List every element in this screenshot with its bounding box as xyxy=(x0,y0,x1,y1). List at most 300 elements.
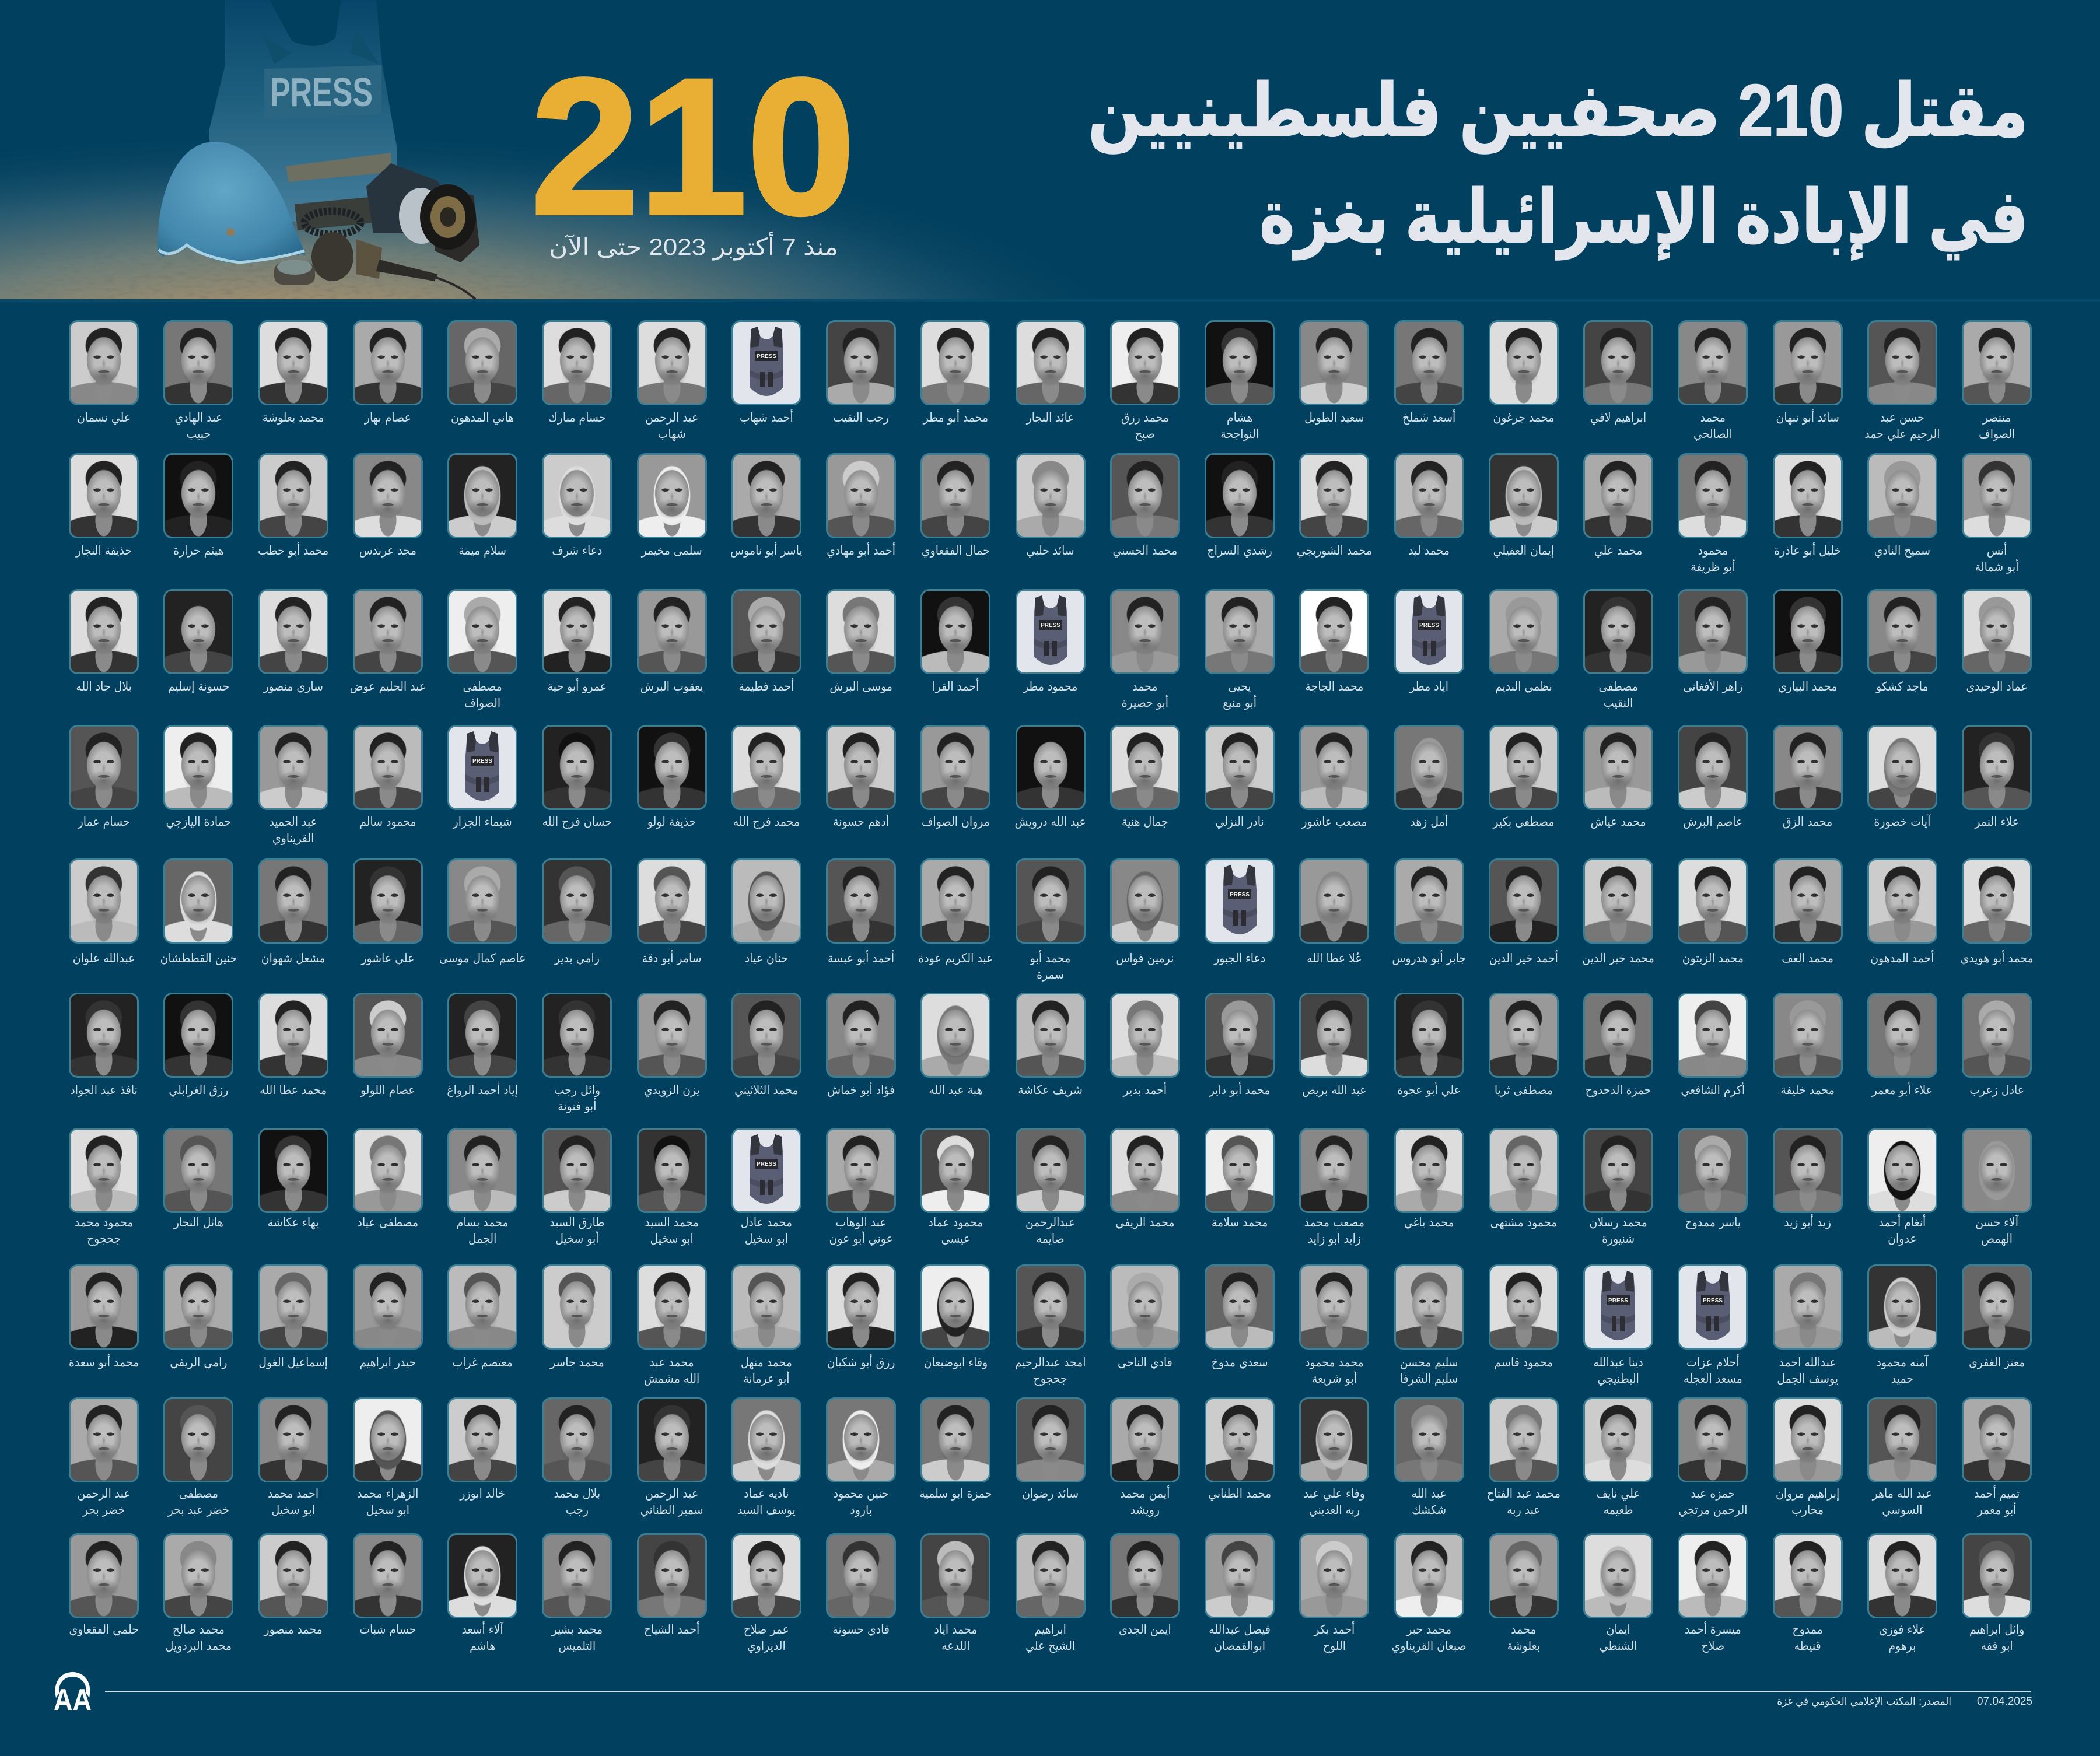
name: عبد الله بريص xyxy=(1302,1083,1367,1097)
card xyxy=(1489,320,1559,425)
portrait xyxy=(1773,453,1843,538)
name: ابو سخيل xyxy=(745,1232,788,1246)
name: محمد بعلوشة xyxy=(262,411,324,425)
portrait xyxy=(1583,320,1653,405)
name: يوسف الجمل xyxy=(1777,1372,1838,1386)
name xyxy=(145,1485,252,1518)
name: محمد أبو هويدي xyxy=(1961,951,2034,965)
card xyxy=(1476,725,1571,846)
name: محمد فرج الله xyxy=(733,815,800,829)
card xyxy=(1571,725,1665,846)
name xyxy=(524,1082,630,1114)
name: محمد سلامة xyxy=(1212,1215,1268,1229)
portrait xyxy=(163,1397,233,1482)
portrait xyxy=(1678,1397,1748,1482)
name: مسعد العجله xyxy=(1684,1372,1742,1386)
name xyxy=(1186,678,1293,711)
name: حنين محمود xyxy=(834,1487,889,1501)
card xyxy=(908,589,1003,711)
portrait xyxy=(1205,589,1275,674)
name xyxy=(1471,1485,1577,1518)
card xyxy=(151,993,246,1114)
name xyxy=(1660,409,1766,442)
portrait xyxy=(353,993,423,1078)
portrait xyxy=(1299,589,1369,674)
card xyxy=(1098,1397,1192,1518)
card xyxy=(624,589,719,711)
portrait xyxy=(1583,725,1653,810)
card xyxy=(719,453,814,575)
portrait xyxy=(1962,320,2032,405)
name xyxy=(1565,1485,1671,1518)
card xyxy=(435,453,530,575)
name: حمادة اليازجي xyxy=(166,815,231,829)
name: سمير الطناني xyxy=(640,1503,704,1517)
card xyxy=(151,725,246,846)
name: أكرم الشافعي xyxy=(1681,1083,1745,1097)
name xyxy=(1376,1485,1482,1518)
name: النواجحة xyxy=(1220,427,1259,441)
card xyxy=(1855,858,1950,983)
card xyxy=(435,993,530,1114)
portrait xyxy=(258,858,328,944)
name: رجب xyxy=(566,1503,589,1517)
portrait xyxy=(447,1397,517,1482)
icon: camera xyxy=(366,163,480,262)
name: التلميس xyxy=(559,1639,596,1653)
name: أبو معمر xyxy=(1978,1503,2017,1517)
card xyxy=(1192,858,1287,983)
name xyxy=(1565,1354,1671,1387)
name: إياد أحمد الرواغ xyxy=(447,1083,518,1097)
name: مصطفى بكير xyxy=(1493,815,1554,829)
name: عُلا عطا الله xyxy=(1307,951,1362,965)
name: زيد أبو زيد xyxy=(1784,1215,1831,1229)
name: ربه العديني xyxy=(1309,1503,1360,1517)
card xyxy=(1665,453,1760,575)
card xyxy=(1855,453,1950,575)
name xyxy=(1565,1621,1671,1654)
name: عبد الوهاب xyxy=(836,1215,887,1229)
card xyxy=(57,725,151,846)
card xyxy=(814,1128,908,1247)
name xyxy=(1092,678,1198,711)
name xyxy=(1281,1354,1387,1387)
portrait xyxy=(69,1533,139,1618)
portrait xyxy=(1205,320,1275,405)
name: خضر بحر xyxy=(83,1503,125,1517)
icon: press vest xyxy=(1678,1264,1748,1350)
name: وفاء علي عبد xyxy=(1304,1487,1365,1501)
name: محمد خير الدين xyxy=(1582,951,1654,965)
card xyxy=(246,589,341,711)
row 4 of portraits xyxy=(57,725,2045,846)
card xyxy=(814,453,908,575)
portrait xyxy=(163,725,233,810)
portrait xyxy=(1016,993,1086,1078)
name: ناديه عماد xyxy=(744,1487,789,1501)
row 10 of portraits xyxy=(57,1533,2045,1654)
name: فادي الناجي xyxy=(1118,1355,1172,1369)
portrait xyxy=(542,1264,612,1350)
portrait xyxy=(163,453,233,538)
name xyxy=(1755,1621,1861,1654)
name: هيثم حرارة xyxy=(173,544,224,558)
card xyxy=(246,858,341,983)
card xyxy=(530,453,624,575)
name: ابو سخيل xyxy=(366,1503,410,1517)
name: محمد اياد xyxy=(934,1622,977,1636)
name: جحجوح xyxy=(1034,1372,1068,1386)
name: مصطفى xyxy=(463,679,502,693)
portrait xyxy=(447,320,517,405)
name xyxy=(1660,1621,1766,1654)
name xyxy=(429,1214,536,1247)
portrait xyxy=(1962,1533,2032,1618)
name xyxy=(998,1214,1104,1247)
portrait xyxy=(1394,858,1464,944)
name: محمد أبو xyxy=(1030,951,1070,965)
portrait xyxy=(1489,725,1559,810)
name: حنين القططشان xyxy=(160,951,237,965)
name: هبة عبد الله xyxy=(929,1083,982,1097)
card xyxy=(1665,993,1760,1114)
portrait xyxy=(353,1533,423,1618)
name: اللدعه xyxy=(942,1639,970,1653)
name: سليم محسن xyxy=(1400,1355,1458,1369)
name: عاصم البرش xyxy=(1683,815,1742,829)
name: اللوح xyxy=(1323,1639,1346,1653)
portrait xyxy=(921,1533,991,1618)
name: محمد عياش xyxy=(1591,815,1646,829)
card xyxy=(1476,589,1571,711)
portrait xyxy=(542,320,612,405)
card xyxy=(624,1128,719,1247)
card xyxy=(908,993,1003,1114)
card xyxy=(1110,320,1180,441)
name: أبو عرمانة xyxy=(743,1372,789,1386)
portrait xyxy=(258,589,328,674)
icon: press vest xyxy=(447,725,517,810)
name: آلاء أسعد xyxy=(462,1622,503,1636)
card xyxy=(1950,993,2044,1114)
name xyxy=(1220,411,1259,441)
portrait xyxy=(1962,725,2032,810)
portrait xyxy=(353,453,423,538)
name: سمرة xyxy=(1037,968,1064,982)
name: ساري منصور xyxy=(263,679,323,693)
portrait xyxy=(353,1264,423,1350)
card xyxy=(1760,453,1855,575)
name: عبدالله علوان xyxy=(73,951,135,965)
name: السوسي xyxy=(1882,1503,1922,1517)
name: وائل ابراهيم xyxy=(1969,1622,2024,1636)
name: أحمد الشياح xyxy=(644,1622,699,1636)
name: امجد عبدالرحيم xyxy=(1015,1355,1086,1369)
card xyxy=(1760,858,1855,983)
portrait xyxy=(732,858,802,944)
card xyxy=(1381,1264,1476,1387)
name: الزهراء محمد xyxy=(357,1487,418,1501)
card xyxy=(1571,1533,1665,1654)
portrait xyxy=(353,1128,423,1213)
card xyxy=(624,1397,719,1518)
name: عصام بهار xyxy=(365,411,411,425)
portrait xyxy=(69,1128,139,1213)
name: حسام مبارك xyxy=(548,411,606,425)
portrait xyxy=(1962,453,2032,538)
card xyxy=(151,1128,246,1247)
name: منتصر xyxy=(1983,411,2011,425)
name: عبد الرحمن xyxy=(77,1487,131,1501)
name: محمد عادل xyxy=(741,1215,792,1229)
portrait xyxy=(1867,1128,1937,1213)
name xyxy=(713,1485,820,1518)
name: علي نايف xyxy=(1597,1487,1640,1501)
card xyxy=(246,725,341,846)
card xyxy=(826,320,896,425)
card xyxy=(530,993,624,1114)
portrait xyxy=(1299,1533,1369,1618)
portrait xyxy=(1867,589,1937,674)
name: محمد الجاجة xyxy=(1305,679,1363,693)
card xyxy=(1287,589,1381,711)
name: عمر صلاح xyxy=(744,1622,789,1636)
card xyxy=(908,725,1003,846)
portrait xyxy=(163,589,233,674)
name: نظمي النديم xyxy=(1495,679,1552,693)
name: محمد الزيتون xyxy=(1682,951,1744,965)
card xyxy=(435,1128,530,1247)
portrait xyxy=(921,1397,991,1482)
name: آلاء حسن xyxy=(1975,1215,2018,1229)
portrait xyxy=(69,858,139,944)
card xyxy=(435,1397,530,1518)
portrait xyxy=(1205,1533,1275,1618)
portrait xyxy=(258,1128,328,1213)
icon: lens cap xyxy=(274,260,315,285)
date: 07.04.2025 xyxy=(1977,1695,2032,1708)
portrait xyxy=(1110,1397,1180,1482)
card xyxy=(341,1264,435,1387)
name: محمد علي xyxy=(1594,544,1642,558)
icon: press vest: PRESS xyxy=(757,1161,776,1168)
name: عائد النجار xyxy=(1027,411,1074,425)
name: خضر عبد بحر xyxy=(168,1503,229,1517)
portrait xyxy=(826,453,896,538)
card xyxy=(908,1397,1003,1518)
name: زايد ابو زايد xyxy=(1308,1232,1361,1246)
portrait xyxy=(353,858,423,944)
name: برهوم xyxy=(1888,1639,1916,1653)
portrait xyxy=(637,725,707,810)
card xyxy=(435,858,530,983)
card xyxy=(1381,1128,1476,1247)
card xyxy=(1950,725,2044,846)
name xyxy=(713,1621,820,1654)
name: أيمن محمد xyxy=(1120,1487,1170,1501)
name: حمزه عبد xyxy=(1690,1487,1735,1501)
name: محمد عبد الفتاح xyxy=(1487,1487,1560,1501)
card xyxy=(1950,1533,2044,1654)
name xyxy=(145,1621,252,1654)
name xyxy=(1660,1354,1766,1387)
name: تميم أحمد xyxy=(1974,1487,2020,1501)
card xyxy=(447,320,517,425)
portrait xyxy=(921,1264,991,1350)
card xyxy=(1855,1128,1950,1247)
name xyxy=(1660,542,1766,575)
card xyxy=(1287,1533,1381,1654)
portrait xyxy=(1678,453,1748,538)
name: فيصل عبدالله xyxy=(1209,1622,1270,1636)
name xyxy=(51,1485,157,1518)
card xyxy=(1571,589,1665,711)
portrait xyxy=(163,1128,233,1213)
name: الشنطي xyxy=(1600,1639,1637,1653)
portrait xyxy=(732,453,802,538)
name: خليل أبو عاذرة xyxy=(1774,544,1841,558)
name: مروان الصواف xyxy=(922,815,990,829)
name: يزن الزويدي xyxy=(644,1083,700,1097)
name: آيات خضورة xyxy=(1874,815,1930,829)
name xyxy=(1944,1621,2050,1654)
portrait xyxy=(637,1264,707,1350)
card xyxy=(258,320,328,425)
card xyxy=(637,320,707,441)
name xyxy=(902,1621,1009,1654)
card xyxy=(151,453,246,575)
name: محمود عماد xyxy=(928,1215,983,1229)
name xyxy=(1281,1621,1387,1654)
name: ياسر ممدوح xyxy=(1685,1215,1741,1229)
name xyxy=(1660,1485,1766,1518)
portrait xyxy=(1773,589,1843,674)
portrait xyxy=(826,858,896,944)
portrait xyxy=(1773,1397,1843,1482)
name: محمد الطناني xyxy=(1208,1487,1271,1501)
name: حسان فرج الله xyxy=(542,815,612,829)
portrait xyxy=(1583,589,1653,674)
portrait xyxy=(542,1397,612,1482)
card xyxy=(151,589,246,711)
name: عمرو أبو حية xyxy=(548,679,607,693)
name xyxy=(618,1485,725,1518)
card xyxy=(57,1264,151,1387)
card xyxy=(1665,858,1760,983)
card xyxy=(719,858,814,983)
portrait xyxy=(1394,725,1464,810)
card xyxy=(1098,993,1192,1114)
portrait xyxy=(1110,1264,1180,1350)
name: بلال محمد xyxy=(554,1487,600,1501)
portrait xyxy=(921,993,991,1078)
name: يوسف السيد xyxy=(737,1503,796,1517)
name: النقيب xyxy=(1604,696,1633,710)
name: نرمين قواس xyxy=(1116,951,1174,965)
name: رشدي السراج xyxy=(1207,544,1272,558)
row 2 of portraits xyxy=(57,453,2045,575)
name: حميد xyxy=(1891,1372,1913,1386)
card xyxy=(246,453,341,575)
portrait xyxy=(921,1128,991,1213)
portrait xyxy=(1867,993,1937,1078)
portrait xyxy=(1110,1533,1180,1618)
icon: press vest xyxy=(1016,589,1086,674)
name: صبح xyxy=(1135,427,1155,441)
card xyxy=(1855,320,1950,442)
portrait xyxy=(1867,725,1937,810)
icon: press vest: PRESS xyxy=(757,353,776,360)
name: رامي الريفي xyxy=(170,1355,228,1369)
card xyxy=(341,858,435,983)
name: أحمد القرا xyxy=(932,679,979,693)
card xyxy=(1192,725,1287,846)
portrait xyxy=(542,453,612,538)
card xyxy=(719,725,814,846)
card xyxy=(814,589,908,711)
name: ضبعان القريناوي xyxy=(1392,1639,1466,1653)
big number 210: 210 xyxy=(531,38,855,255)
name: حلمي الفقعاوي xyxy=(69,1622,139,1636)
portrait xyxy=(163,1533,233,1618)
card xyxy=(542,320,612,425)
name: سائد أبو نبهان xyxy=(1776,411,1839,425)
name xyxy=(645,411,698,441)
card xyxy=(732,320,802,425)
name: أمل زهد xyxy=(1410,815,1448,829)
portrait xyxy=(1773,1128,1843,1213)
portrait xyxy=(1394,1533,1464,1618)
name: عبد ربه xyxy=(1507,1503,1541,1517)
card xyxy=(921,320,991,425)
name: ابو سخيل xyxy=(271,1503,315,1517)
card xyxy=(1760,993,1855,1114)
portrait xyxy=(258,1397,328,1482)
portrait xyxy=(447,1264,517,1350)
card xyxy=(1003,589,1098,711)
card xyxy=(435,1264,530,1387)
name xyxy=(1281,1485,1387,1518)
card xyxy=(1394,320,1464,425)
title: مقتل 210 صحفيين فلسطينيين xyxy=(1088,69,2028,154)
portrait xyxy=(542,589,612,674)
card xyxy=(1192,453,1287,575)
name: عبد الله درويش xyxy=(1014,815,1086,829)
name: محمد خليفة xyxy=(1780,1083,1835,1097)
portrait xyxy=(1489,1397,1559,1482)
name: عوني أبو عون xyxy=(830,1232,893,1246)
portrait xyxy=(1773,993,1843,1078)
name: جمال الفقعاوي xyxy=(922,544,990,558)
portrait xyxy=(258,453,328,538)
name: أحمد أبو عبسة xyxy=(828,951,894,965)
name: محمد جرغون xyxy=(1493,411,1554,425)
portrait xyxy=(637,320,707,405)
card xyxy=(1571,858,1665,983)
card xyxy=(1098,1264,1192,1387)
name: الهمص xyxy=(1981,1232,2013,1246)
name: مصطفى xyxy=(179,1487,218,1501)
row 9 of portraits xyxy=(57,1397,2045,1518)
portrait xyxy=(69,1264,139,1350)
name: أنس xyxy=(1987,544,2007,558)
card xyxy=(1287,453,1381,575)
portrait xyxy=(69,320,139,405)
name: الرحيم علي حمد xyxy=(1864,427,1940,441)
portrait xyxy=(1016,1264,1086,1350)
portrait xyxy=(1773,320,1843,405)
